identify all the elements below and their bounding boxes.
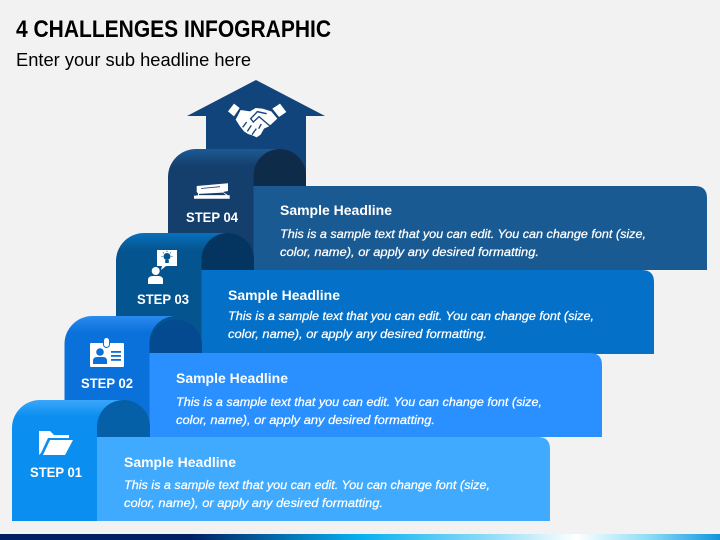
- icon: handshake: [228, 104, 286, 137]
- title: 4 CHALLENGES INFOGRAPHIC: [16, 16, 331, 43]
- step tab: [116, 233, 228, 354]
- step label: STEP 02: [81, 375, 133, 391]
- body text: This is a sample text that you can edit. You can change font (size,: [176, 395, 542, 409]
- body text: This is a sample text that you can edit. You can change font (size,: [228, 309, 594, 323]
- body text: color, name), or apply any desired formatting.: [280, 245, 539, 259]
- step tab: [64, 316, 176, 437]
- icon: ID badge: [90, 338, 124, 367]
- step label: STEP 04: [186, 209, 238, 225]
- body text: [280, 227, 646, 259]
- icon: stapler: [194, 183, 230, 199]
- arrow with handshake icon: [187, 80, 325, 190]
- body text: color, name), or apply any desired formatting.: [124, 496, 383, 510]
- panel: step 4 text band: [253, 186, 707, 270]
- panel: step 3 text band: [201, 270, 654, 354]
- body text: [124, 478, 490, 510]
- body text: color, name), or apply any desired formatting.: [176, 413, 435, 427]
- step 2: [64, 316, 602, 437]
- body text: [176, 395, 542, 427]
- headline: Sample Headline: [124, 454, 236, 470]
- dark fold arc: [150, 320, 202, 353]
- dark fold arc: [97, 400, 150, 437]
- step 1: [12, 400, 550, 521]
- body text: color, name), or apply any desired formatting.: [228, 327, 487, 341]
- footer gradient bar: [0, 534, 720, 540]
- step tab: [168, 149, 280, 270]
- step label: STEP 03: [137, 291, 189, 307]
- body text: This is a sample text that you can edit. You can change font (size,: [124, 478, 490, 492]
- panel: step 2 text band: [149, 353, 602, 437]
- dark fold arc: [201, 233, 254, 270]
- step 4: [168, 149, 707, 270]
- panel: step 1 text band: [97, 437, 550, 521]
- subtitle: Enter your sub headline here: [16, 50, 251, 70]
- dark fold arc: [253, 149, 306, 186]
- headline: Sample Headline: [228, 287, 340, 303]
- icon: person with idea bubble: [148, 250, 177, 284]
- body text: This is a sample text that you can edit. You can change font (size,: [280, 227, 646, 241]
- icon: folder: [39, 431, 73, 455]
- step label: STEP 01: [30, 464, 82, 480]
- step tab: [12, 400, 124, 521]
- headline: Sample Headline: [176, 370, 288, 386]
- step 3: [116, 233, 654, 354]
- body text: [228, 309, 594, 341]
- headline: Sample Headline: [280, 202, 392, 218]
